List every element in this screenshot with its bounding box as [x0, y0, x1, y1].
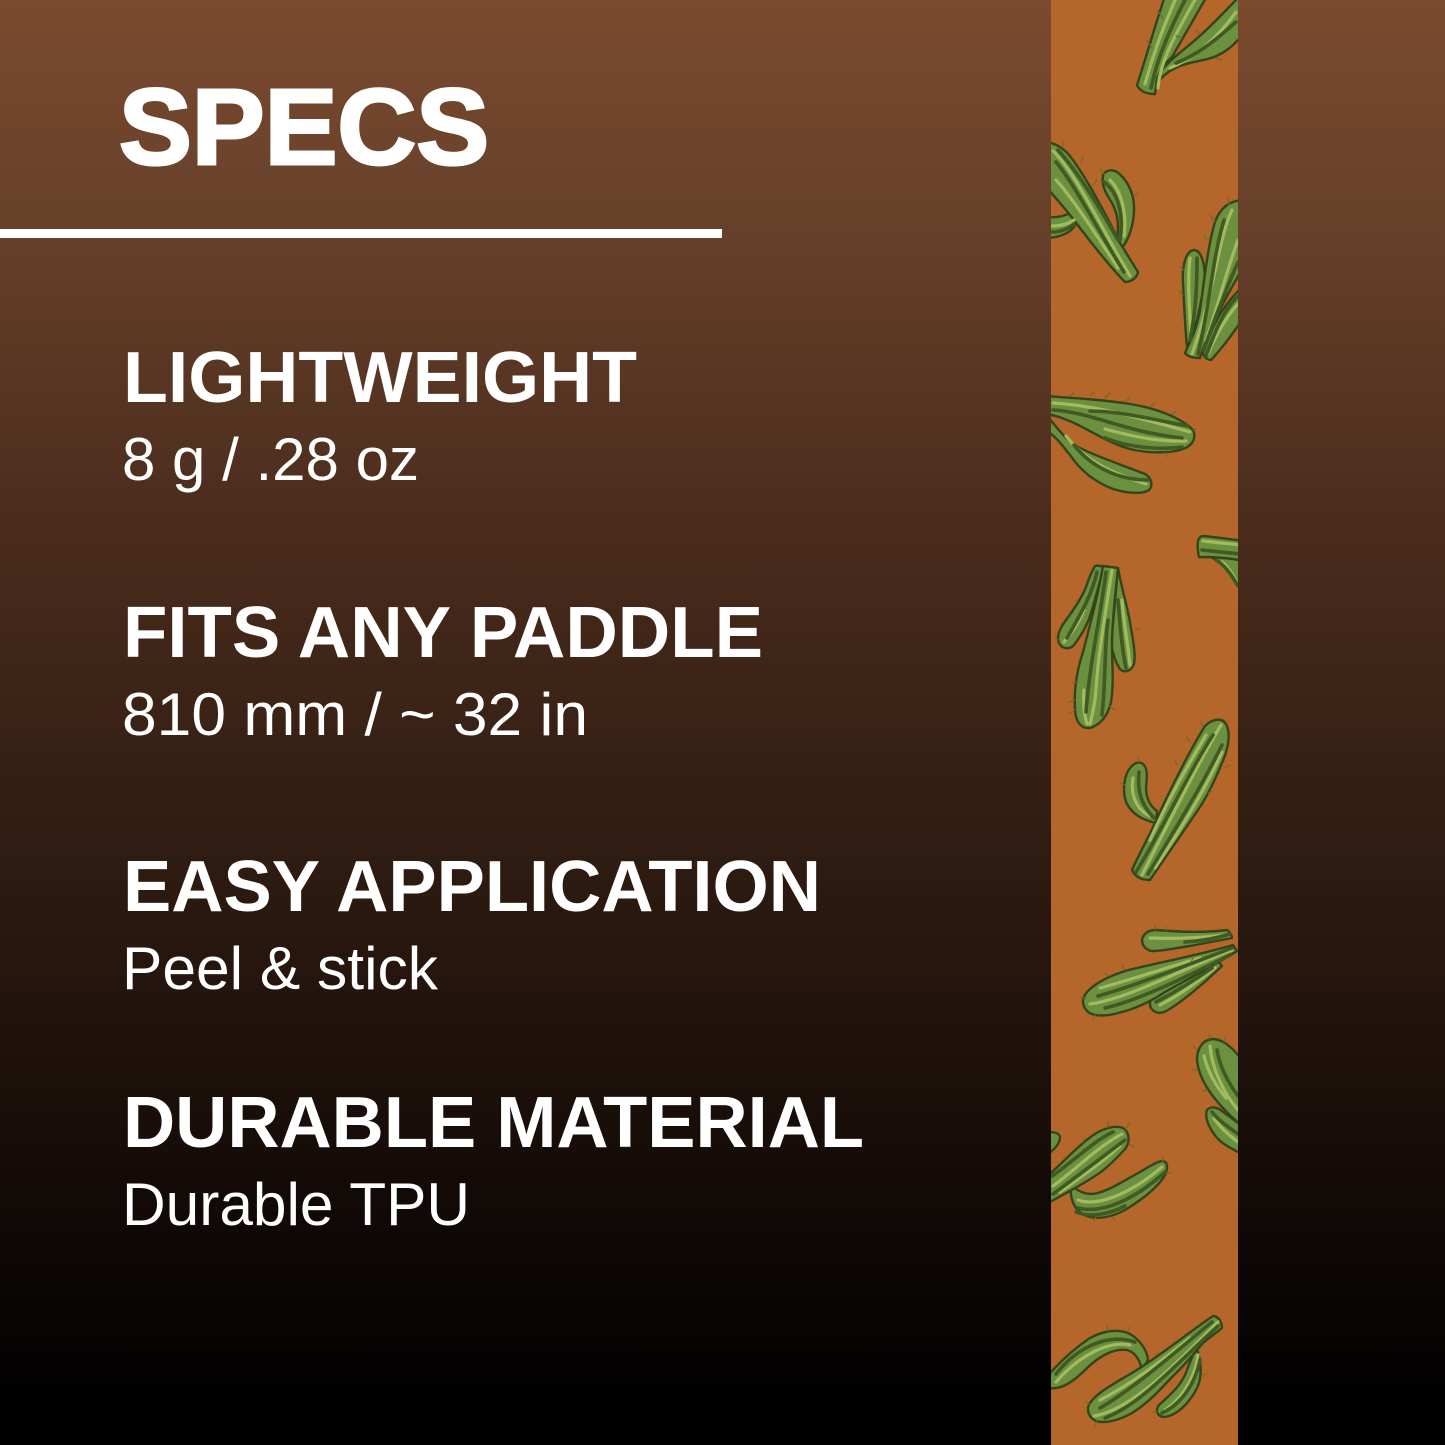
- spec: lightweight: LIGHTWEIGHT: [123, 338, 637, 418]
- icon: cactus 2: [1045, 141, 1138, 282]
- spec: easy application: Peel & stick: [122, 935, 439, 1002]
- icon: cactus 11: [1044, 1316, 1222, 1426]
- spec: durable material: Durable TPU: [122, 1171, 470, 1238]
- icon: cactus 1: [1137, 0, 1245, 94]
- title underline: [0, 229, 722, 238]
- spec: lightweight: 8 g / .28 oz: [122, 426, 419, 493]
- icon: cactus 10: [1045, 1122, 1171, 1220]
- spec: fits any paddle: FITS ANY PADDLE: [123, 593, 763, 673]
- spec: fits any paddle: 810 mm / ~ 32 in: [122, 681, 588, 748]
- spec: fits any paddle: [122, 593, 763, 748]
- spec: easy application: [122, 847, 821, 1002]
- icon: cactus 4: [1045, 392, 1196, 493]
- spec: durable material: [122, 1083, 864, 1238]
- icon: cactus 8: [1081, 926, 1237, 1020]
- icon: cactus 5: [1196, 534, 1238, 590]
- icon: cactus 3: [1179, 197, 1245, 360]
- icon: cactus 6: [1055, 566, 1139, 728]
- patterned cactus strip: [1044, 0, 1245, 1445]
- spec: lightweight: [122, 338, 637, 493]
- title: SPECS: [119, 66, 489, 187]
- spec: durable material: DURABLE MATERIAL: [123, 1083, 864, 1163]
- icon: cactus 9: [1192, 1034, 1238, 1154]
- spec: easy application: EASY APPLICATION: [123, 847, 821, 927]
- icon: cactus 7: [1120, 720, 1230, 880]
